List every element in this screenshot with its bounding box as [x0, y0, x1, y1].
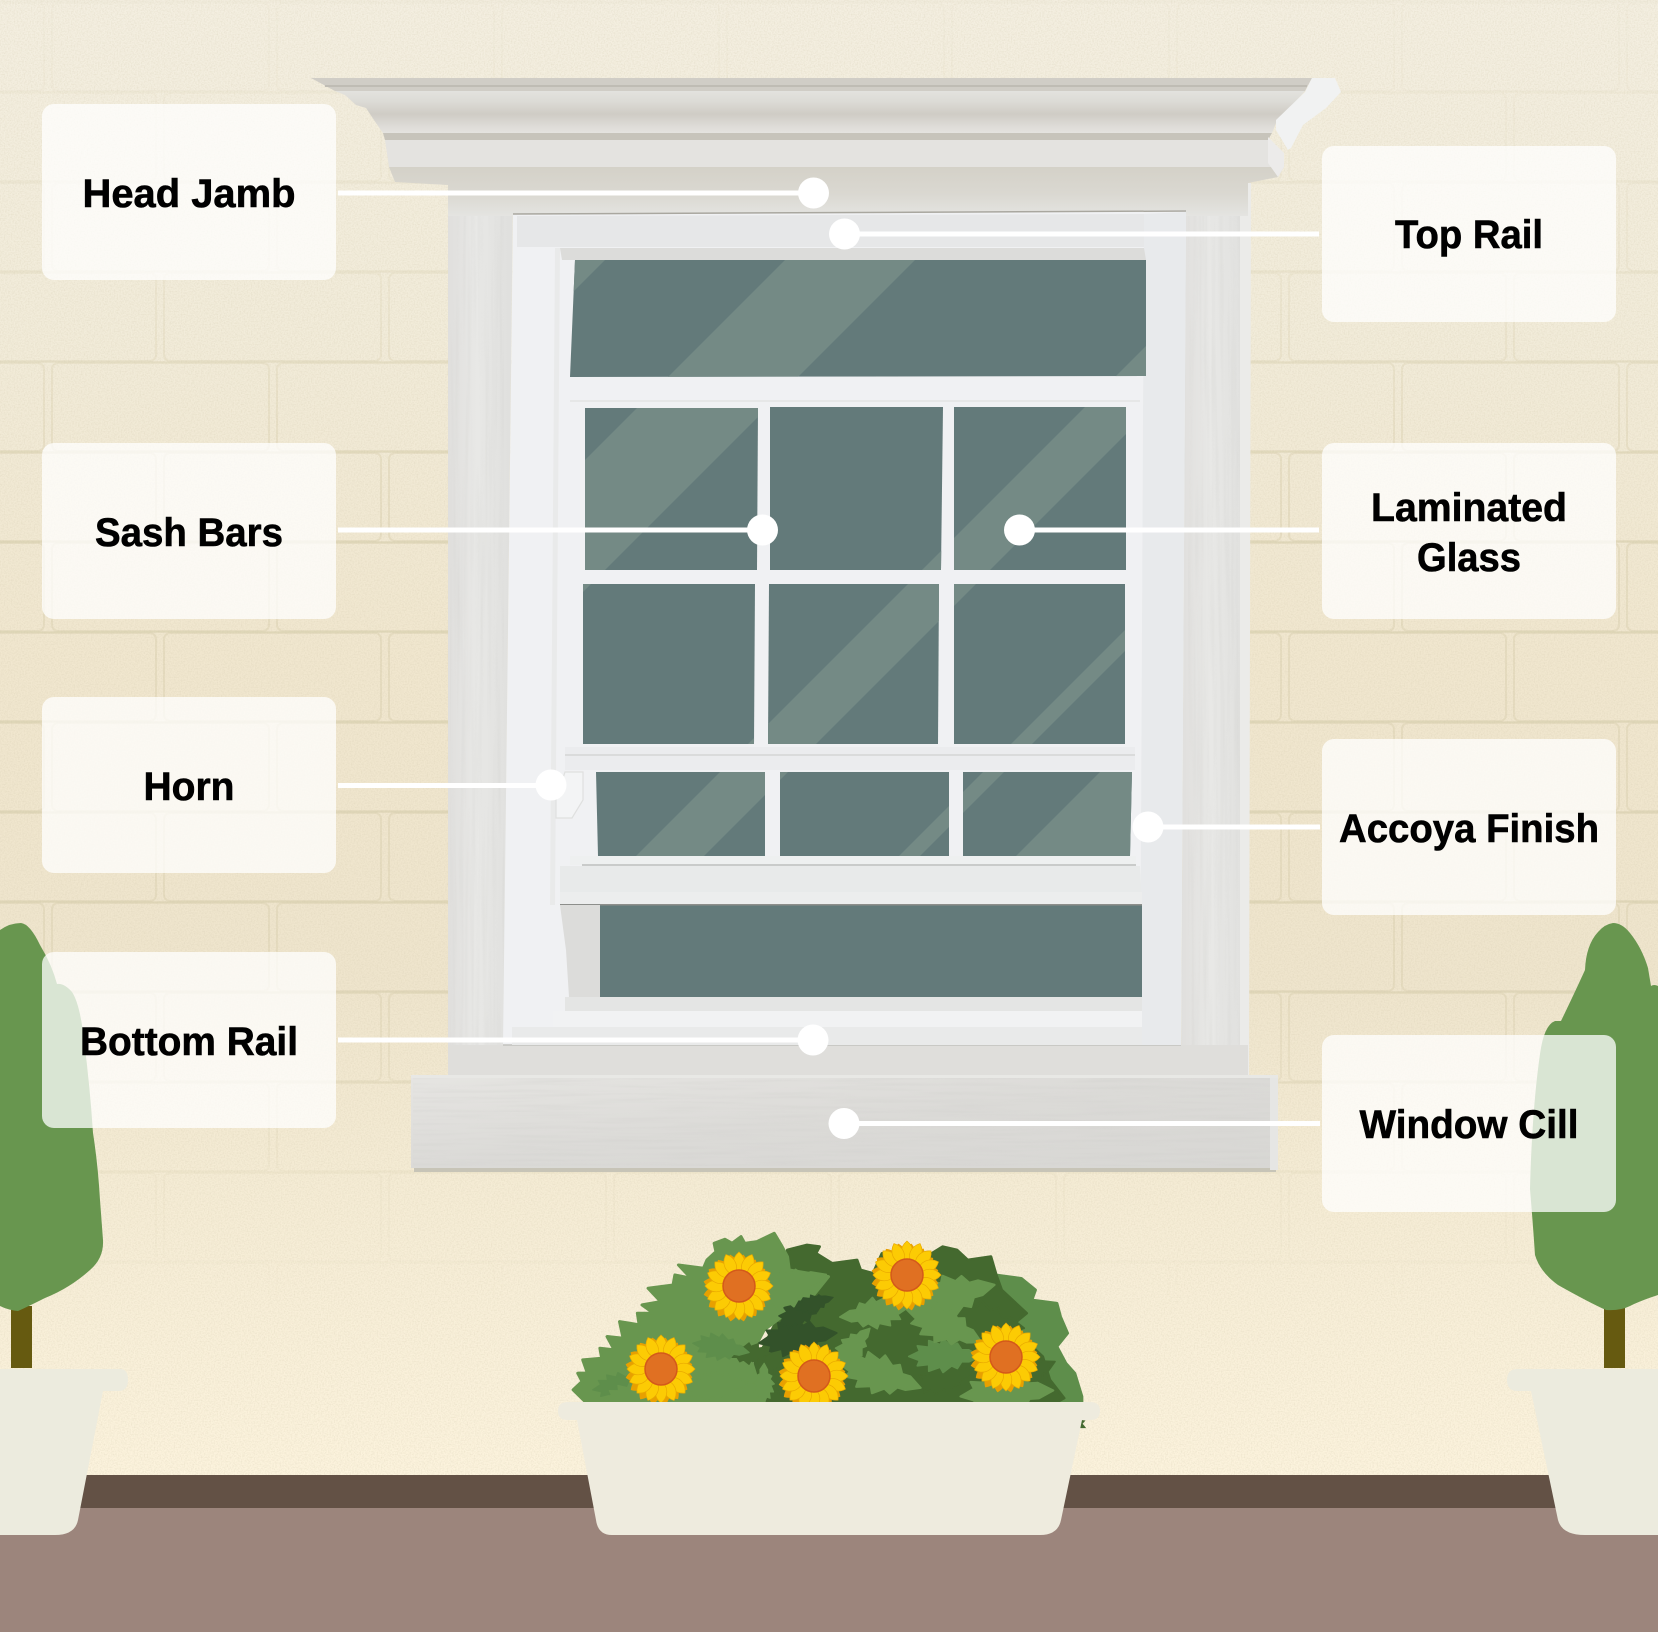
pane: row 2 right [954, 584, 1125, 744]
card [42, 697, 336, 873]
pane: top light [570, 260, 1146, 377]
small stray leaf [1079, 1420, 1086, 1428]
cornice moulding [311, 78, 1341, 177]
window cill [411, 1075, 1278, 1172]
card [1322, 1035, 1616, 1212]
ground: dark plinth and pavement [0, 1475, 1658, 1632]
flower box [558, 1233, 1100, 1535]
sunflower: top left [697, 1248, 777, 1328]
pane: row 1 right [954, 407, 1126, 570]
pane: row 2 centre [768, 584, 939, 744]
label: Window Cill [1360, 1103, 1578, 1147]
label: Head Jamb [82, 172, 296, 216]
pane: row 2 left [583, 584, 755, 744]
outer jambs [448, 183, 1251, 1076]
left lining shade [550, 248, 560, 905]
sunflower: bottom left [619, 1331, 699, 1411]
leader [1004, 514, 1319, 546]
label second line: Glass [1417, 536, 1521, 580]
lower sash side panel [560, 905, 600, 997]
light left foliage [573, 1233, 828, 1402]
frame shadow lines [503, 211, 1186, 1045]
callout: Accoya Finish [1132, 739, 1616, 915]
pot [1507, 1369, 1658, 1535]
foliage [0, 923, 103, 1311]
pane: bottom light [600, 905, 1142, 997]
leader [338, 1024, 828, 1056]
leader [1132, 812, 1320, 842]
card [1322, 739, 1616, 915]
pane: row 3 left [596, 772, 765, 856]
leader [338, 514, 778, 546]
top rail [517, 214, 1146, 260]
leader [829, 218, 1319, 250]
sunflower: right [964, 1319, 1044, 1399]
glass reflections [574, 260, 1146, 856]
sunflower: bottom centre [772, 1338, 852, 1418]
card [42, 952, 336, 1128]
label: Bottom Rail [80, 1020, 298, 1064]
callout: Laminated Glass [1004, 443, 1616, 619]
pot [0, 1369, 128, 1535]
pane: row 1 centre [770, 407, 943, 570]
trunk [11, 1306, 32, 1368]
card [1322, 146, 1616, 322]
right lining [1140, 212, 1186, 1045]
callout: Bottom Rail [42, 952, 828, 1128]
callout: Head Jamb [42, 104, 829, 280]
label: Top Rail [1395, 213, 1543, 257]
window assembly [312, 78, 1341, 1172]
callout: Sash Bars [42, 443, 778, 619]
bottom rail [512, 997, 1142, 1045]
callout: Window Cill [828, 1035, 1616, 1212]
card [42, 443, 336, 619]
left potted tree [0, 923, 128, 1535]
pane: row 3 right [963, 772, 1132, 856]
card [1322, 443, 1616, 619]
leaf clusters [591, 1256, 1063, 1417]
pane: row 1 left [585, 408, 758, 570]
foliage [1530, 923, 1658, 1310]
back right foliage [978, 1275, 1082, 1406]
pane: row 3 centre [780, 772, 949, 856]
label: Laminated [1371, 486, 1567, 530]
label: Accoya Finish [1339, 807, 1599, 851]
label: Sash Bars [95, 511, 283, 555]
leader [338, 770, 566, 800]
trunk [1604, 1306, 1625, 1368]
card [42, 104, 336, 280]
leader [338, 178, 829, 208]
glazing bars and rails [560, 400, 1142, 906]
callout: Top Rail [829, 146, 1616, 322]
callout: Horn [42, 697, 566, 873]
sunflower: top right [865, 1237, 945, 1317]
head soffit shading [389, 167, 1284, 216]
right potted tree [1507, 923, 1658, 1535]
glazing panes [570, 260, 1146, 997]
planter [558, 1402, 1100, 1535]
label: Horn [144, 765, 234, 809]
dark foliage mass [736, 1245, 1064, 1402]
sash box frame [503, 210, 1186, 1045]
bush foliage [573, 1233, 1086, 1428]
leader [828, 1108, 1320, 1139]
horn [556, 772, 583, 818]
